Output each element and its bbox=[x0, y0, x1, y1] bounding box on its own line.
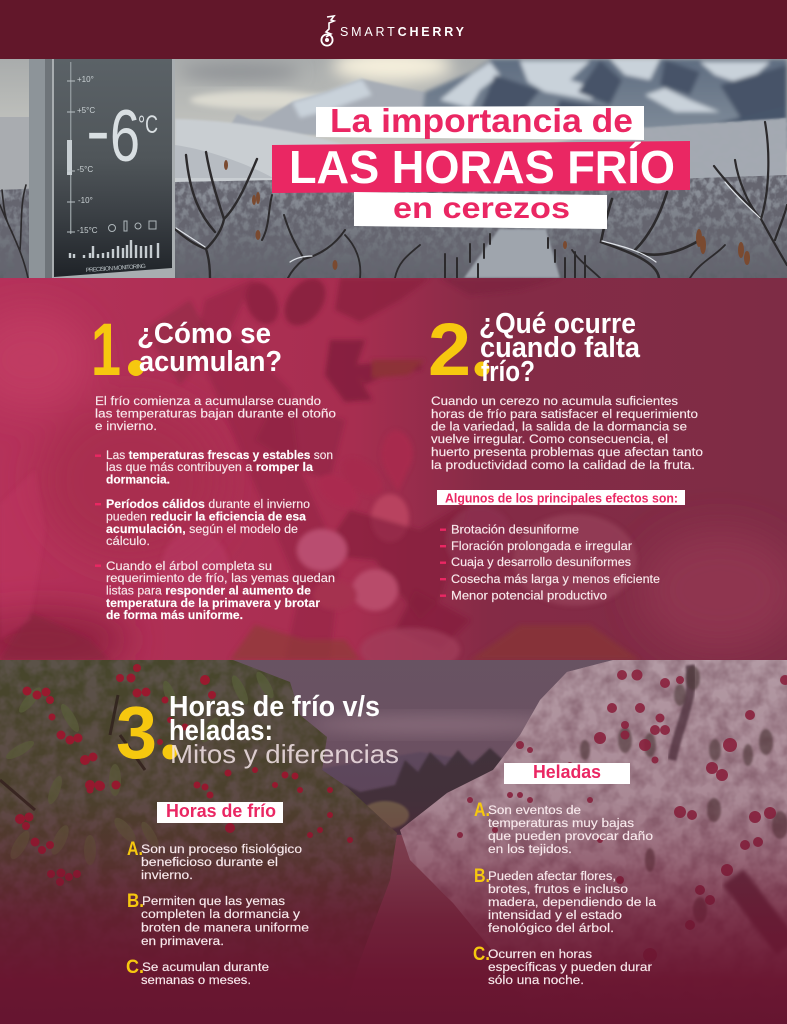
bullet: requirement complete: Cuando el árbol completa su bbox=[106, 559, 272, 573]
item C: semanas o meses. bbox=[141, 973, 251, 987]
heading 3: Horas de frío v/s bbox=[169, 691, 380, 723]
device: digital thermometer bbox=[29, 59, 175, 278]
heading 2: frío? bbox=[481, 356, 535, 388]
heading 2: cuando falta bbox=[480, 332, 641, 364]
label: Horas de frío: Horas de frío bbox=[166, 801, 276, 821]
item B: Permiten que las yemas bbox=[142, 894, 285, 908]
bullet: requirement complete: listas para responder al aumento de bbox=[106, 584, 311, 598]
bullet: cool stable temperatures: las que más contribuyen a romper la bbox=[106, 460, 313, 474]
item A: Son eventos de bbox=[488, 803, 581, 817]
item A: que pueden provocar daño bbox=[488, 829, 653, 843]
scale labels: +5°C bbox=[77, 106, 95, 115]
number 1: 1 bbox=[91, 308, 121, 391]
heading 1 bbox=[137, 318, 282, 378]
background: cherry blossom section bbox=[0, 271, 787, 672]
monitoring bar graph bbox=[70, 240, 158, 258]
paragraph: vuelve irregular. Como consecuencia, el bbox=[431, 432, 668, 446]
title bbox=[272, 102, 690, 229]
paragraph bbox=[431, 394, 703, 472]
heading 2: ¿Qué ocurre bbox=[479, 308, 636, 340]
header band bbox=[0, 0, 787, 59]
bullet: warm periods: acumulación, según el modelo de bbox=[106, 522, 298, 536]
number 2 bbox=[428, 308, 490, 391]
heading 3: Mitos y diferencias bbox=[170, 739, 399, 769]
column: frost bbox=[473, 762, 656, 987]
item C: Ocurren en horas bbox=[488, 947, 592, 961]
item A: temperaturas muy bajas bbox=[488, 816, 634, 830]
item B: B. bbox=[127, 891, 144, 912]
temperature reading: - bbox=[86, 91, 110, 171]
heading 3: heladas: bbox=[169, 715, 273, 747]
item C: C. bbox=[126, 957, 144, 978]
label: Heladas: Heladas bbox=[533, 762, 601, 782]
item B: en primavera. bbox=[141, 934, 224, 948]
item B: brotes, frutos e incluso bbox=[488, 882, 628, 896]
intro paragraph: El frío comienza a acumularse cuando bbox=[95, 394, 321, 408]
logo: SmartCherry: SMARTCHERRY bbox=[340, 25, 465, 39]
intro paragraph bbox=[95, 394, 336, 433]
bullet: cool stable temperatures: Las temperaturas frescas y estables son bbox=[106, 448, 333, 462]
number 2: 2 bbox=[428, 308, 471, 391]
label: Heladas bbox=[504, 762, 630, 784]
item A: Son un proceso fisiológico bbox=[141, 842, 302, 856]
item B: B. bbox=[474, 866, 490, 887]
intro paragraph: las temperaturas bajan durante el otoño bbox=[95, 406, 336, 420]
item B: Pueden afectar flores, bbox=[488, 869, 616, 883]
title line 1: La importancia de bbox=[330, 102, 633, 139]
logo: SmartCherry bbox=[321, 16, 465, 46]
paragraph: horas de frío para satisfacer el requerimiento bbox=[431, 407, 698, 421]
item A: A. bbox=[474, 800, 490, 821]
scale labels: -5°C bbox=[77, 165, 93, 174]
bullet: cool stable temperatures: dormancia. bbox=[106, 472, 170, 486]
scale bar bbox=[67, 62, 75, 234]
item B: fenológico del árbol. bbox=[488, 921, 614, 935]
section 3: chill hours vs frost bbox=[116, 691, 656, 987]
item A: invierno. bbox=[141, 868, 193, 882]
item A: en los tejidos. bbox=[488, 842, 572, 856]
item C bbox=[126, 957, 269, 987]
bullet: requirement complete bbox=[95, 559, 335, 622]
title line 3: en cerezos bbox=[393, 192, 570, 225]
item C bbox=[473, 944, 652, 987]
effects list: Menor potencial productivo bbox=[451, 588, 607, 602]
number 3: 3 bbox=[116, 691, 157, 774]
bullet: warm periods: pueden reducir la eficiencia de esa bbox=[106, 510, 306, 524]
effects list: Cuaja y desarrollo desuniformes bbox=[451, 555, 631, 569]
item C: Se acumulan durante bbox=[142, 960, 269, 974]
effects list: Cosecha más larga y menos eficiente bbox=[451, 572, 660, 586]
section 1: how chill accumulates bbox=[91, 308, 336, 622]
number 3 bbox=[116, 691, 178, 774]
background: orchard photo section bbox=[0, 660, 787, 1024]
temperature reading: °C bbox=[138, 111, 158, 139]
section 2: lack of chill bbox=[428, 308, 703, 602]
item A bbox=[127, 839, 302, 882]
scale labels: +10° bbox=[77, 75, 94, 84]
bullet: warm periods: cálculo. bbox=[106, 534, 150, 548]
heading 2 bbox=[479, 308, 641, 388]
effects list bbox=[440, 522, 660, 602]
bullet: cool stable temperatures bbox=[95, 448, 333, 486]
item A: A. bbox=[127, 839, 143, 860]
bullet: warm periods: Períodos cálidos durante el invierno bbox=[106, 497, 310, 511]
device caption: PRECISION MONITORING bbox=[86, 264, 146, 274]
bullet: requirement complete: temperatura de la primavera y brotar bbox=[106, 596, 320, 610]
hero photo: frosted orchard bbox=[0, 50, 787, 278]
scale labels: -15°C bbox=[77, 226, 98, 235]
item C: específicas y pueden durar bbox=[488, 960, 652, 974]
item A: beneficioso durante el bbox=[141, 855, 278, 869]
item B bbox=[127, 891, 309, 948]
bullet: requirement complete: requerimiento de frío, las yemas quedan bbox=[106, 571, 335, 585]
item B: madera, dependiendo de la bbox=[488, 895, 656, 909]
heading 3 bbox=[169, 691, 399, 769]
status icons bbox=[108, 221, 156, 232]
item C: sólo una noche. bbox=[488, 973, 584, 987]
item B: intensidad y el estado bbox=[488, 908, 622, 922]
paragraph: la productividad como la calidad de la fruta. bbox=[431, 458, 695, 472]
paragraph: de la variedad, la salida de la dormancia se bbox=[431, 420, 687, 434]
scale labels bbox=[77, 75, 98, 235]
title line 3 bbox=[354, 192, 607, 229]
heading 1: acumulan? bbox=[139, 346, 282, 378]
item B bbox=[474, 866, 656, 935]
item A bbox=[474, 800, 653, 856]
item B: completen la dormancia y bbox=[141, 907, 301, 921]
effects list: Floración prolongada e irregular bbox=[451, 539, 632, 553]
item C: C. bbox=[473, 944, 490, 965]
title line 2: LAS HORAS FRÍO bbox=[289, 141, 675, 193]
bullet: warm periods bbox=[95, 497, 310, 548]
effects list: Brotación desuniforme bbox=[451, 522, 579, 536]
bullet: requirement complete: de forma más uniforme. bbox=[106, 608, 243, 622]
temperature reading: 6 bbox=[110, 96, 140, 177]
orchard path bbox=[464, 229, 560, 278]
effects label: Algunos de los principales efectos son: bbox=[445, 490, 678, 506]
paragraph: Cuando un cerezo no acumula suficientes bbox=[431, 394, 678, 408]
temperature reading bbox=[86, 91, 158, 177]
item B: broten de manera uniforme bbox=[141, 920, 309, 934]
scale labels: -10° bbox=[78, 196, 93, 205]
paragraph: huerto presenta problemas que afectan tanto bbox=[431, 445, 703, 459]
intro paragraph: e invierno. bbox=[95, 419, 157, 433]
column: chill hours bbox=[126, 801, 309, 987]
heading 1: ¿Cómo se bbox=[137, 318, 271, 350]
